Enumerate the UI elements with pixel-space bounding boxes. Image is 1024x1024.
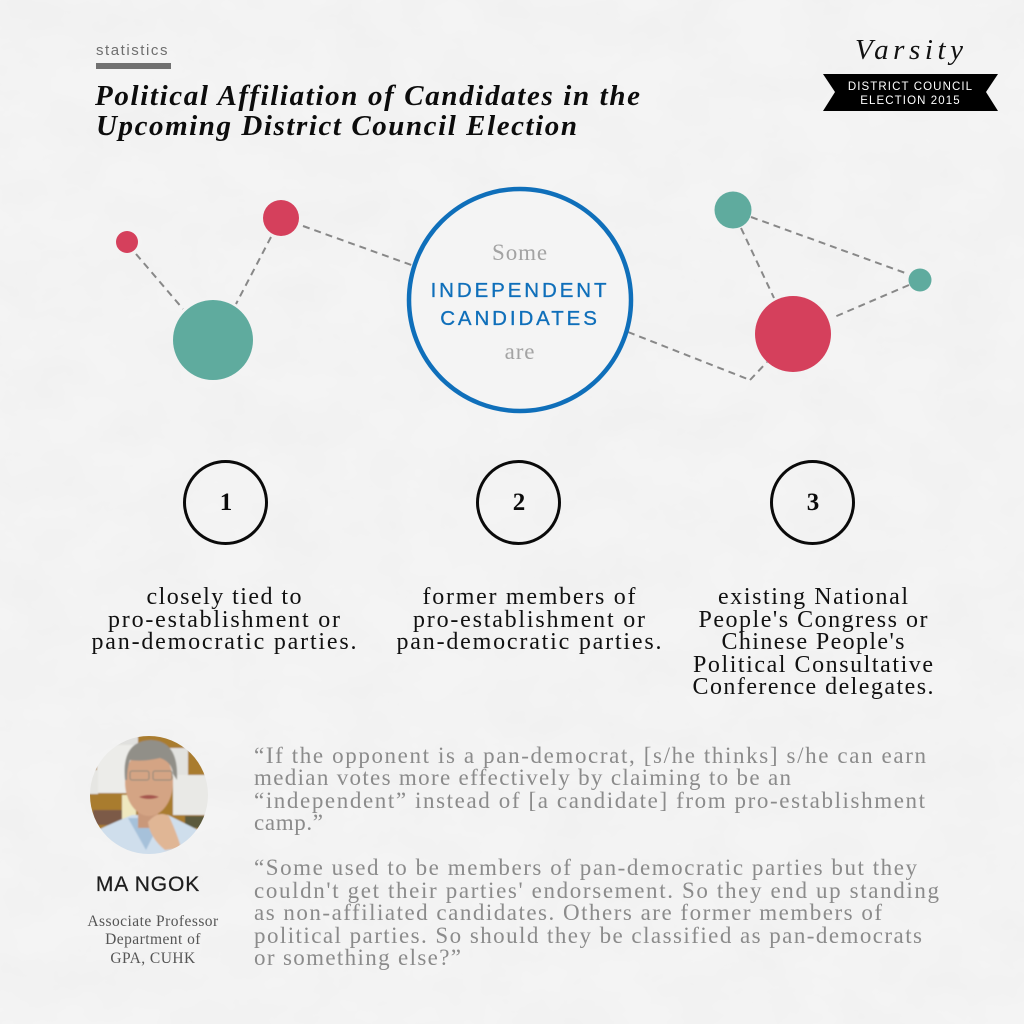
name: Ma Ngok: MA NGOK [96, 873, 200, 896]
title: Upcoming District Council Election [96, 110, 577, 142]
number badge 1 [184, 462, 266, 544]
quote 1: “If the opponent is a pan-democrat, [s/he thinks] s/he can earn [254, 743, 927, 768]
text block: item 3 [692, 584, 934, 700]
quote 2: “Some used to be members of pan-democratic parties but they [254, 855, 918, 880]
number badge 2 [478, 462, 560, 544]
central circle: independent candidates [409, 189, 631, 411]
title: Political Affiliation of Candidates in the [94, 80, 640, 112]
job title [87, 913, 219, 967]
number badge 2: 2 [513, 489, 525, 516]
quote 1: camp.” [254, 810, 323, 835]
text block: item 3: existing National [718, 584, 908, 610]
quote 2: or something else?” [254, 945, 461, 970]
quote 2: as non-affiliated candidates. Others are former members of [254, 900, 882, 925]
text block: item 3: Chinese People's [722, 629, 904, 655]
job title: Associate Professor [87, 913, 219, 930]
job title: GPA, CUHK [110, 950, 196, 967]
portrait: Ma Ngok [88, 734, 210, 860]
ribbon: District Council Election 2015 [823, 74, 998, 111]
text block: item 1: closely tied to [146, 584, 302, 610]
number badge 1: 1 [220, 489, 232, 516]
central circle: independent candidates: CANDIDATES [440, 307, 600, 330]
central circle: independent candidates: Some [492, 240, 548, 265]
quote 1 [254, 743, 927, 835]
quote 2 [254, 855, 940, 970]
ribbon: District Council Election 2015: ELECTION 2015 [860, 95, 961, 107]
text block: item 3: People's Congress or [698, 607, 928, 633]
text block: item 3: Conference delegates. [692, 674, 934, 700]
section label: statistics [96, 42, 171, 69]
text block: item 2: pan-democratic parties. [396, 629, 662, 655]
quote 1: “independent” instead of [a candidate] from pro-establishment [254, 788, 926, 813]
ribbon: District Council Election 2015: DISTRICT COUNCIL [848, 81, 973, 93]
text block: item 2: pro-establishment or [413, 607, 645, 633]
left network diagram [116, 200, 414, 380]
quote 2: political parties. So should they be classified as pan-democrats [254, 923, 922, 948]
number badge 3 [772, 462, 854, 544]
logo: Varsity: Varsity [855, 34, 963, 66]
number badge 3: 3 [807, 489, 819, 516]
central circle: independent candidates: are [505, 339, 535, 364]
text block: item 3: Political Consultative [693, 652, 933, 678]
text block: item 1: pan-democratic parties. [92, 629, 356, 655]
text block: item 1 [92, 584, 356, 655]
text block: item 1: pro-establishment or [108, 607, 340, 633]
central circle: independent candidates: INDEPENDENT [431, 279, 609, 302]
quote 1: median votes more effectively by claiming to be an [254, 765, 792, 790]
section label: statistics: statistics [96, 42, 169, 59]
quote 2: couldn't get their parties' endorsement. So they end up standing [254, 878, 940, 903]
text block: item 2 [396, 584, 662, 655]
text block: item 2: former members of [422, 584, 636, 610]
right network diagram [628, 192, 932, 380]
title [94, 80, 640, 142]
job title: Department of [105, 931, 201, 948]
